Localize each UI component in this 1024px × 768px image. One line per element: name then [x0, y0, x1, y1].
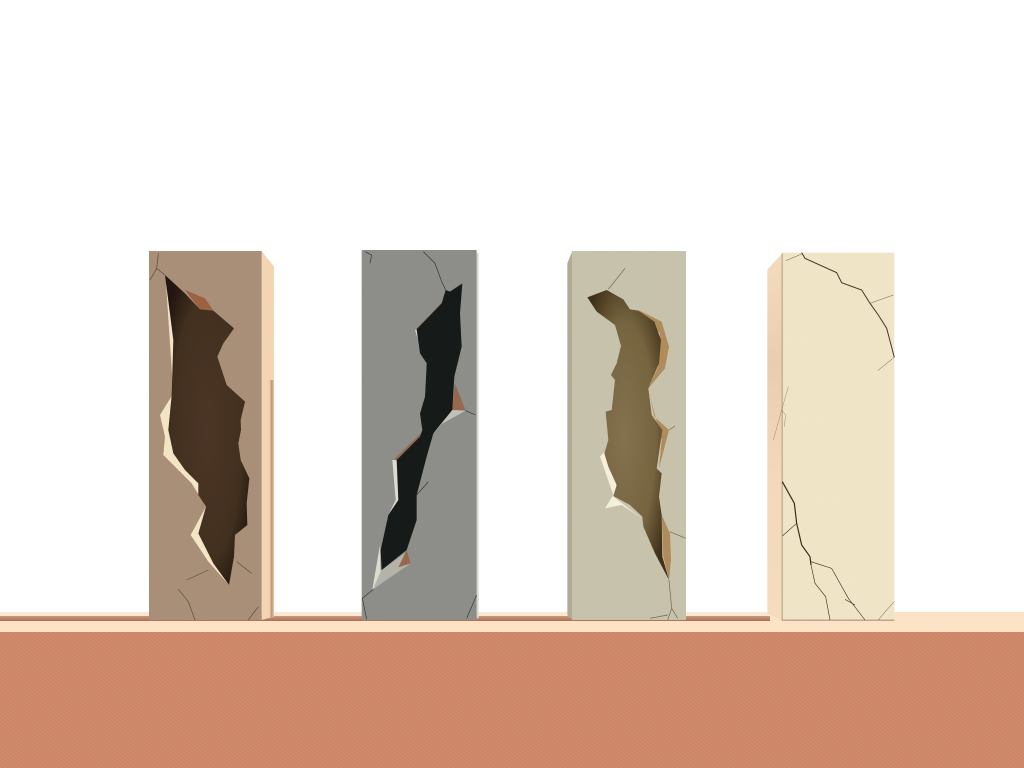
block 4 lower left crack [782, 482, 894, 620]
block 3 hole [587, 290, 669, 580]
block 3: sage block with ochre hole [567, 251, 686, 620]
block 4 side hairline [773, 387, 788, 440]
block 1 hole [165, 275, 249, 585]
block 2 hole [381, 283, 462, 570]
block 2 pale lower facet [433, 410, 466, 433]
block 1 rust inner edge [185, 290, 213, 311]
block 4: cream block with thin cracks [767, 253, 894, 621]
block 3 ochre inner edges [638, 310, 671, 580]
block 1: brown block with large hole [149, 251, 274, 620]
block 2 rust inner edges [394, 303, 466, 567]
ledge: terracotta base and peach top [0, 612, 1024, 768]
block 2 pale broken edges [372, 329, 430, 589]
block 2 lower facet [373, 552, 411, 589]
block 2: grey block with diagonal crack [362, 250, 479, 620]
block 4 upper right crack [786, 253, 894, 371]
block 1 pale broken edge [160, 283, 233, 585]
block 1 hairline cracks [150, 253, 258, 620]
block 3 pale edge [600, 448, 642, 518]
block 2 hairline cracks [362, 252, 477, 619]
block 3 hairline cracks [608, 268, 686, 620]
